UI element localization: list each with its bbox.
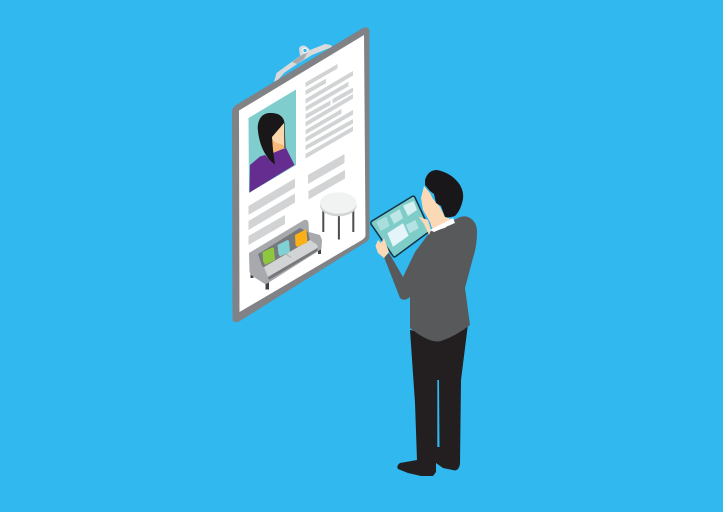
- left hand: [376, 238, 389, 258]
- paper sheet: [239, 35, 366, 312]
- sofa legs: [250, 247, 321, 290]
- right hand: [418, 216, 431, 235]
- tablet body: [371, 196, 430, 257]
- clipboard: [232, 27, 370, 322]
- sofa front shadow: [268, 248, 318, 280]
- right column thick lines: [308, 154, 345, 200]
- profile photo: [248, 90, 296, 193]
- woman hair: [258, 113, 286, 164]
- teal cushion: [278, 240, 290, 256]
- woman body: [250, 148, 294, 192]
- shirt collar: [430, 218, 455, 232]
- sofa seat: [264, 240, 318, 277]
- table legs: [322, 208, 354, 240]
- green cushion: [262, 248, 275, 265]
- tablet tile 3: [403, 201, 417, 216]
- hair: [425, 170, 463, 217]
- sofa back inset: [258, 228, 310, 270]
- face and neck: [421, 186, 454, 231]
- tablet tile 2: [390, 209, 403, 224]
- clipboard metal clip: [274, 44, 332, 82]
- sofa frame: [249, 220, 322, 284]
- table top: [320, 195, 357, 216]
- tablet striped tile: [406, 220, 419, 233]
- seat divider: [286, 254, 291, 258]
- table: [320, 192, 357, 240]
- clipboard board: [232, 27, 370, 322]
- gap between legs: [437, 380, 440, 447]
- orange cushion: [295, 230, 308, 247]
- trousers: [397, 324, 468, 476]
- man: [371, 170, 477, 476]
- left column thick lines: [248, 178, 295, 245]
- right column text lines: [306, 64, 353, 158]
- sofa: [249, 220, 322, 290]
- tablet tile 1: [376, 217, 390, 231]
- woman face: [272, 123, 285, 146]
- woman neck: [271, 140, 285, 153]
- tablet: [371, 196, 430, 257]
- jacket: [384, 216, 477, 341]
- tablet large tile: [387, 223, 409, 247]
- photo background: [248, 90, 296, 193]
